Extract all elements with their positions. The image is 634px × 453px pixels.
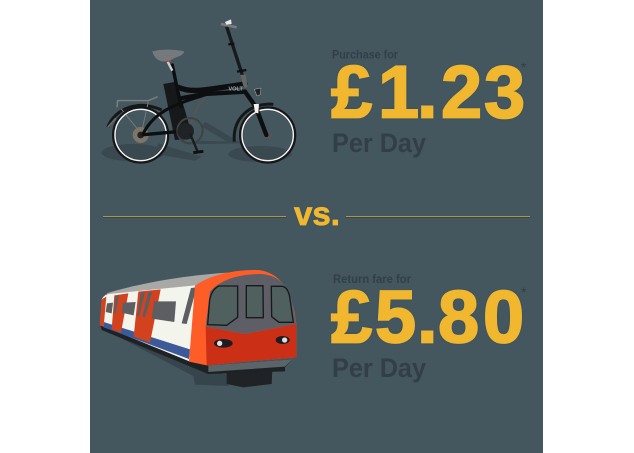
handlebar stem and grips [221, 19, 248, 87]
purchase label: Purchase for [332, 48, 398, 62]
chainring and kickstand [177, 118, 203, 153]
brand lettering on frame: VOLT [228, 87, 244, 93]
divider right [346, 216, 530, 218]
cab grey mask [206, 274, 296, 334]
train shadow [99, 325, 228, 386]
rear wheel [114, 108, 167, 162]
front mudguard [234, 104, 273, 142]
price: £5.80: £5.80 [331, 276, 524, 358]
battery pack [163, 82, 193, 140]
rear mudguard and rack [108, 97, 162, 132]
background panel [90, 0, 543, 453]
train side body [100, 285, 195, 362]
red doors [100, 289, 161, 343]
bike ground shadow [102, 122, 292, 162]
per day label: Per Day [332, 128, 426, 158]
headlight [254, 88, 261, 96]
bike frame [143, 65, 266, 135]
vs heading: vs. [294, 195, 340, 232]
seat post and saddle [152, 50, 184, 71]
front wheel [241, 108, 294, 162]
asterisk: * [521, 284, 527, 300]
cab red lower [206, 324, 296, 365]
right headlight [276, 336, 290, 344]
illustration: underground train [99, 270, 296, 387]
side windows [106, 287, 197, 324]
left headlight [214, 339, 233, 348]
blue stripe [104, 322, 190, 359]
front fork highlight [254, 104, 259, 113]
price: £1.23: £1.23 [331, 50, 525, 134]
cab front [189, 270, 296, 365]
return fare label: Return fare for [333, 272, 411, 286]
cab windows [208, 286, 293, 325]
divider left [103, 216, 286, 218]
train roof [107, 273, 228, 297]
per day label: Per Day [332, 353, 426, 383]
asterisk: * [521, 59, 527, 75]
train undercarriage [101, 326, 292, 387]
illustration: folding electric bike [102, 19, 294, 162]
